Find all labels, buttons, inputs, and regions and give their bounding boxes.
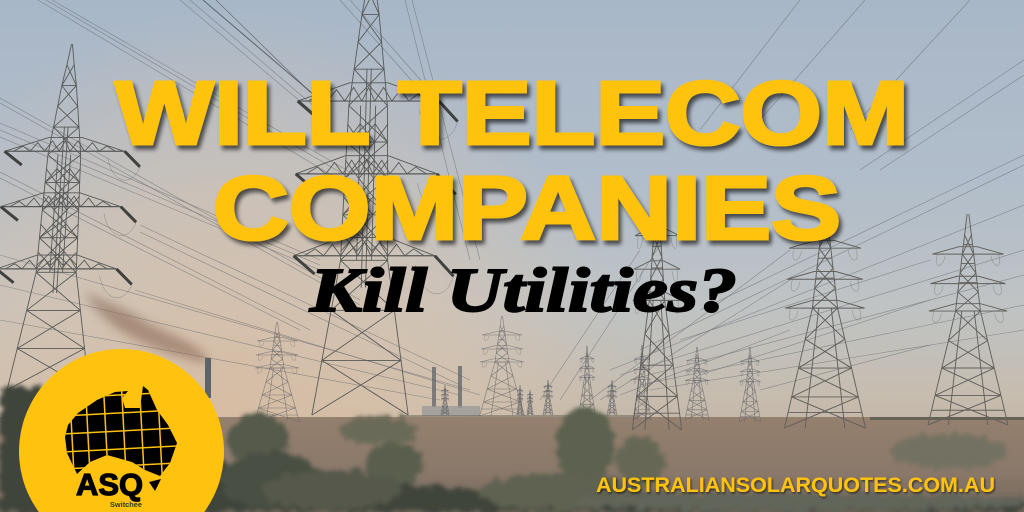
smoke plume [85, 292, 207, 364]
distant tree line [400, 415, 1024, 420]
ground [0, 417, 1024, 512]
Switchee mark: Switchee [110, 502, 142, 509]
shrubs and foreground vegetation [0, 386, 1024, 512]
title: WILL TELECOM COMPANIES [115, 64, 909, 259]
large pylon: left [0, 44, 148, 390]
title line 1: WILL TELECOM [115, 64, 909, 164]
ASQ wordmark: ASQ [76, 467, 143, 502]
power lines [0, 0, 1024, 400]
distant chimneys and factory [205, 358, 480, 416]
distant small pylons [254, 316, 761, 422]
website URL: AUSTRALIANSOLARQUOTES.COM.AU [596, 474, 995, 497]
large pylon: centre [289, 0, 462, 415]
icon: Australia map with solar grid [65, 386, 177, 491]
icon: Tasmania [149, 479, 161, 491]
subtitle: Kill Utilities?: Kill Utilities? [309, 257, 737, 325]
ASQ logo badge [19, 349, 224, 512]
title line 2: COMPANIES [213, 159, 841, 259]
large pylons: right [632, 190, 1008, 430]
